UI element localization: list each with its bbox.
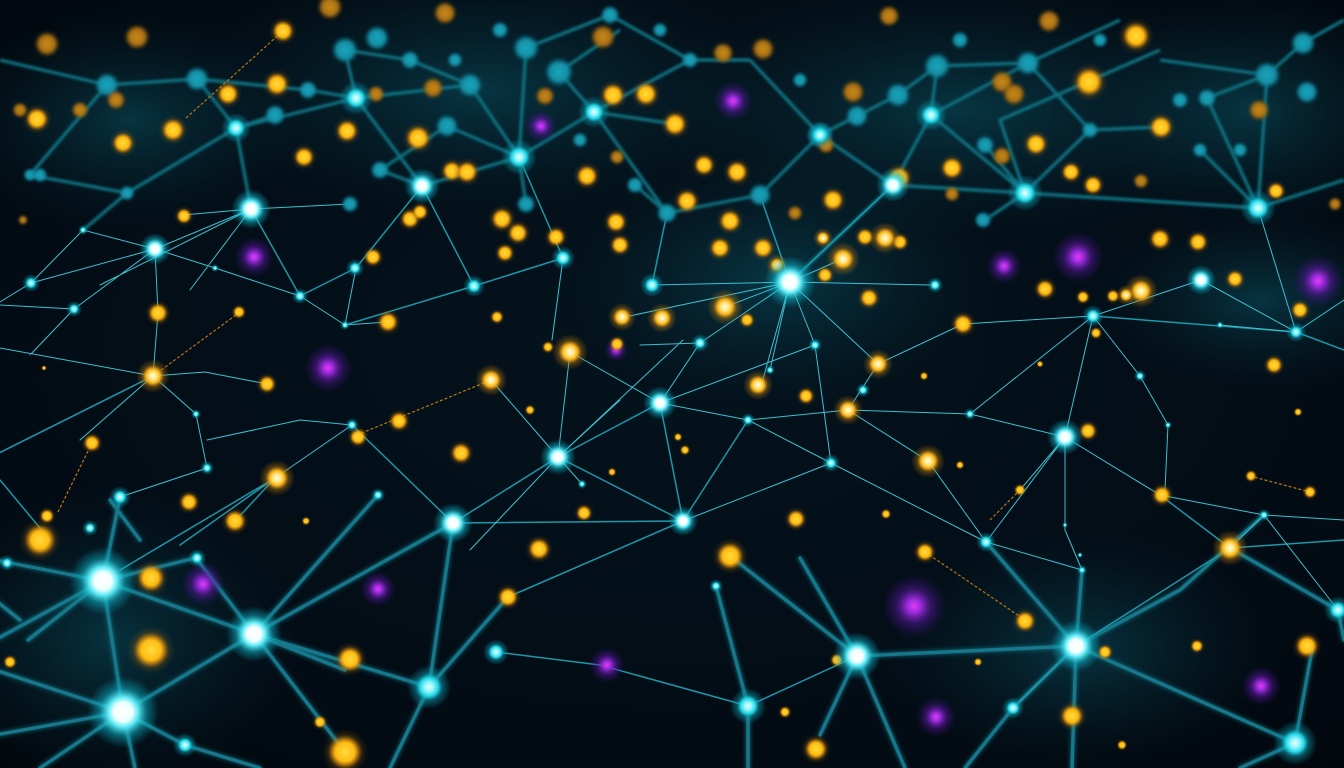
bright amber-white nodes [136,222,1248,566]
purple glow nodes [181,81,1344,737]
dotted amber filaments [58,31,1310,620]
thin network lines [0,204,1344,610]
teal bokeh [23,5,1319,229]
white-hot hub nodes [69,168,1216,748]
amber bokeh [12,0,1342,225]
heavy foreground connection lines [0,495,1344,768]
blurred upper network lines [0,15,1344,282]
blurred background bokeh nodes [12,0,1342,229]
medium connection lines [0,157,1344,708]
